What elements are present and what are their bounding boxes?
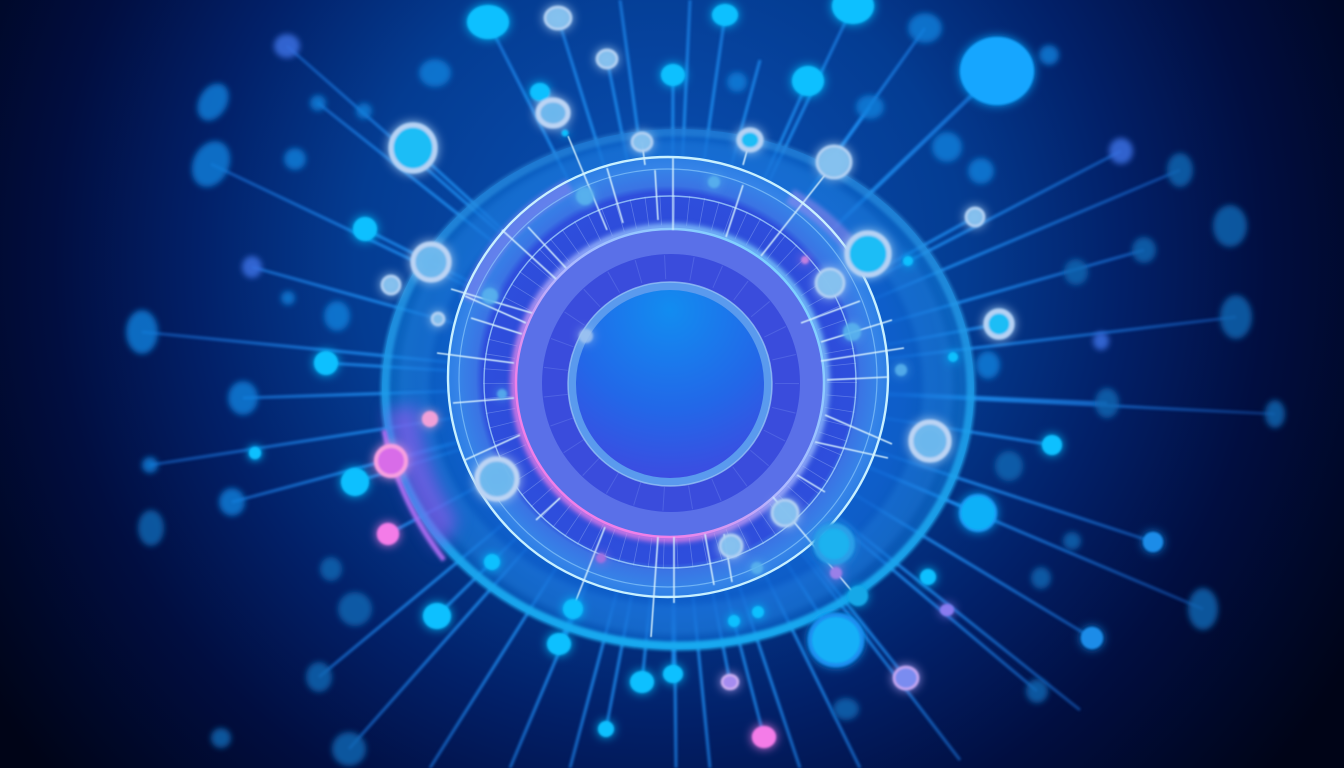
halo rim (385, 132, 971, 646)
core circle (568, 282, 772, 486)
disk ticks (555, 267, 787, 499)
violet nodes (722, 604, 954, 689)
inner disk (514, 227, 826, 539)
fine radial ticks (498, 210, 842, 554)
disk glow (514, 227, 826, 539)
violet glow on halo (386, 405, 458, 552)
disk dark band (542, 254, 800, 512)
muted ringed nodes (413, 100, 949, 562)
core thin ring (568, 282, 772, 486)
violet rim arc (384, 430, 444, 560)
pink nodes (376, 256, 842, 748)
mid blue nodes (1081, 532, 1163, 649)
nodes (249, 0, 1163, 748)
dial band (448, 157, 888, 597)
pale nodes (382, 7, 984, 557)
cyan nodes (249, 0, 1062, 737)
inner tick ring (484, 196, 856, 568)
disk outer band (516, 229, 824, 537)
violet arc band (468, 186, 570, 300)
large blue nodes (810, 37, 1034, 665)
outer halo fill (382, 129, 974, 649)
dial spokes (437, 136, 904, 637)
core ring (572, 286, 768, 482)
halo inner band (414, 156, 938, 620)
second ring (459, 169, 877, 587)
small dots on dial (482, 176, 907, 574)
violet arc band right (790, 196, 868, 270)
white outer ring (448, 157, 888, 597)
concentric dial (448, 157, 888, 597)
ringed nodes (391, 125, 1012, 337)
